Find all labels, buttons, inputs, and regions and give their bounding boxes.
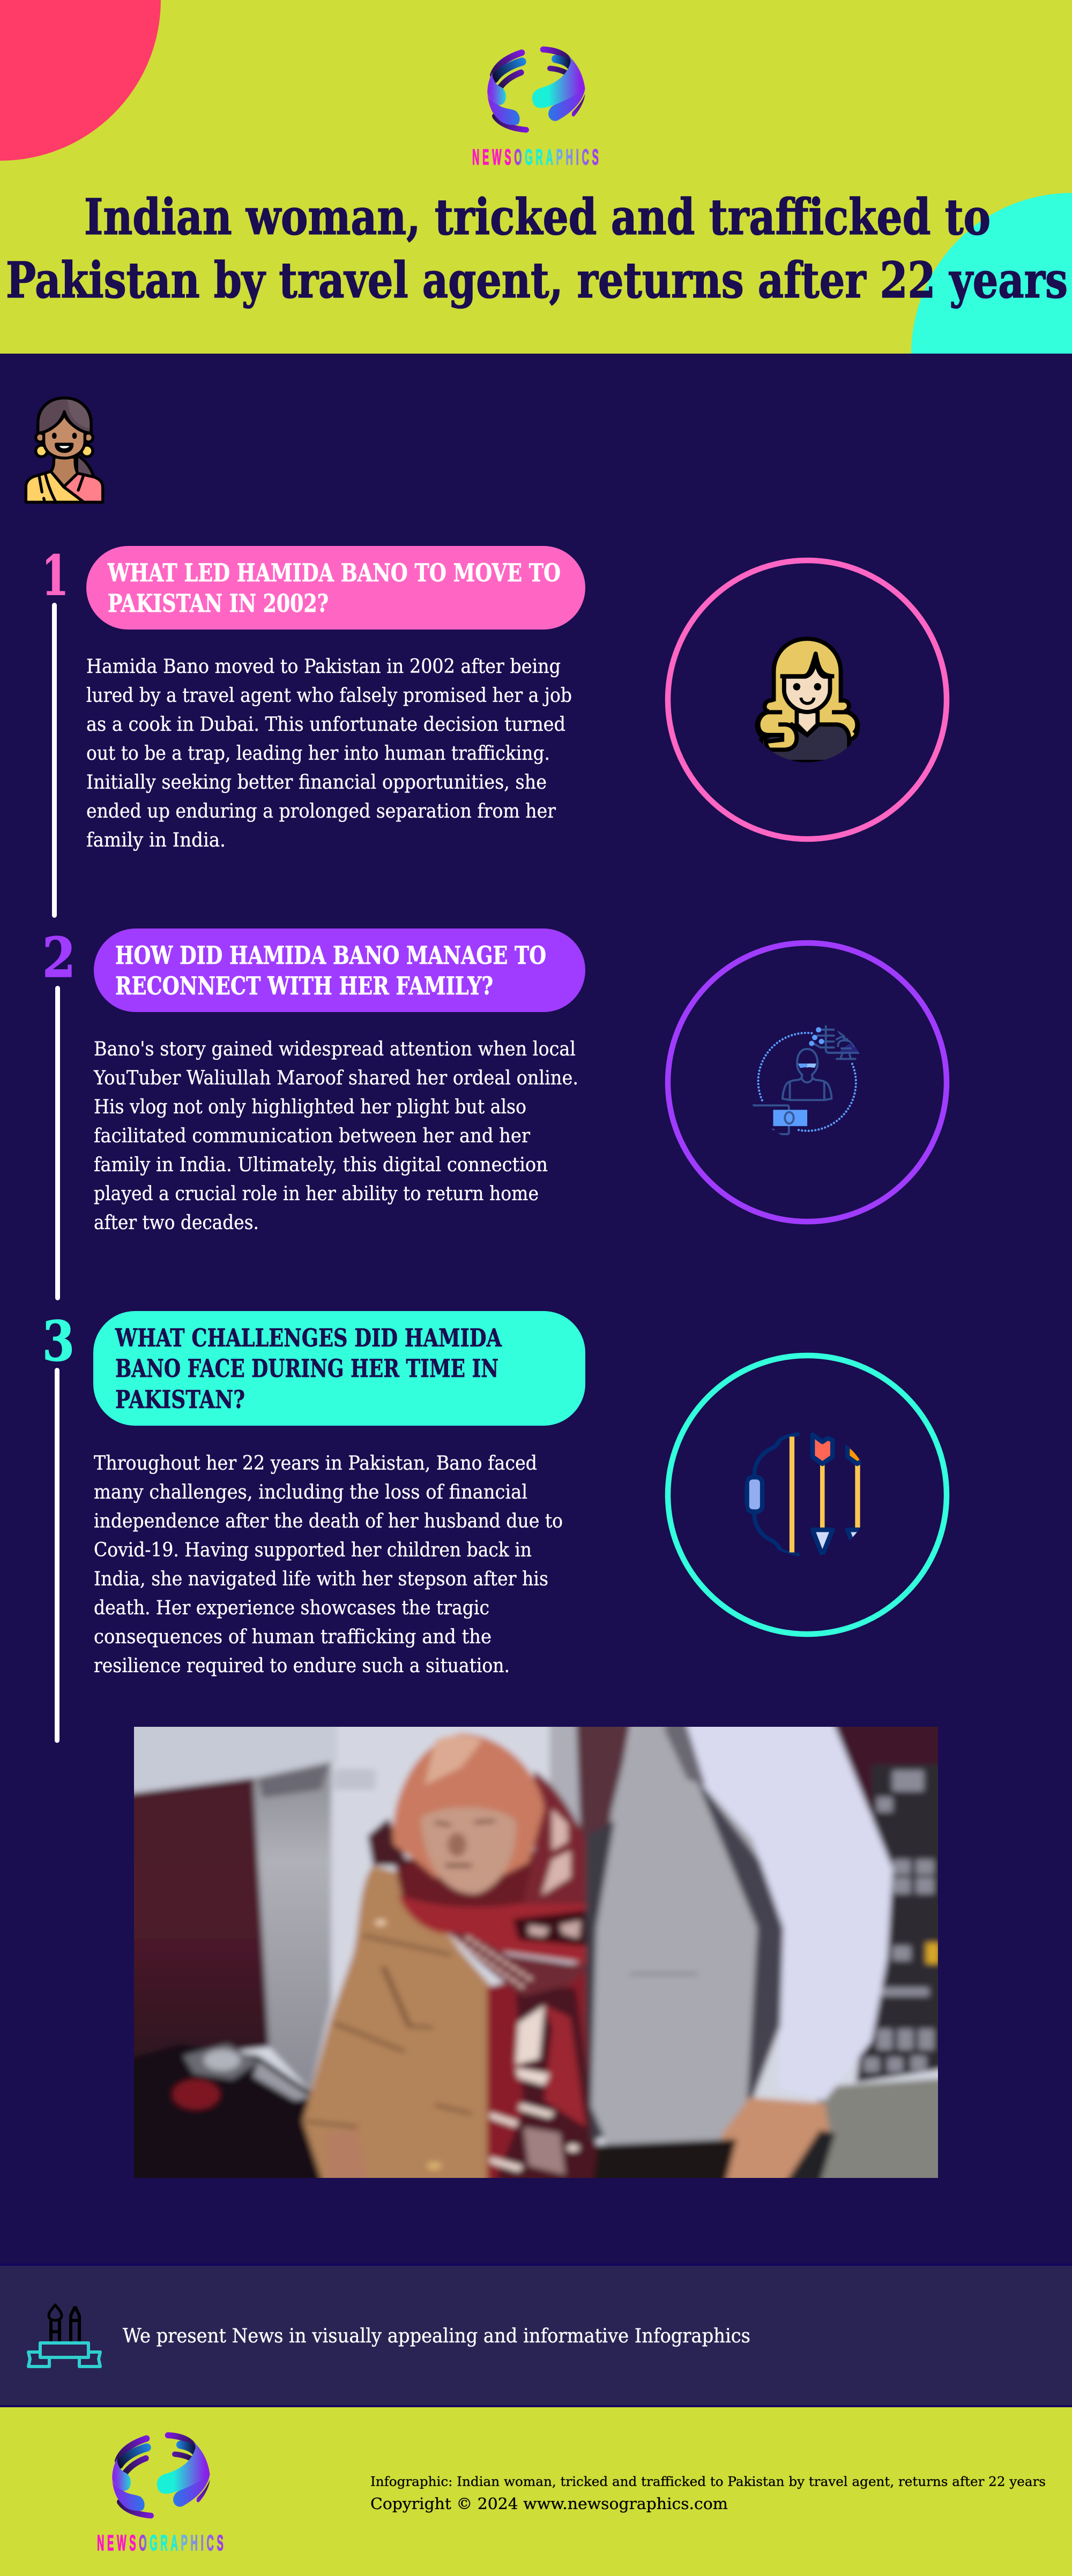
text block: answer 3: Throughout her 22 years in Pakistan, Bano faced — [94, 1452, 537, 1474]
tagline text: We present News in visually appealing and informative Infographics — [123, 2325, 750, 2347]
icon: brushes on ribbon — [28, 2305, 100, 2367]
panel: question 2 heading: RECONNECT WITH HER FAMILY? — [115, 971, 493, 1000]
number 1: 1 — [42, 544, 69, 608]
circle: bow and arrows icon — [668, 1356, 947, 1634]
panel: question 3 heading: WHAT CHALLENGES DID HAMIDA — [115, 1323, 502, 1352]
panel: question 1 heading: WHAT LED HAMIDA BANO TO MOVE TO — [107, 558, 561, 587]
tagline band — [0, 2264, 1072, 2407]
text block: answer 3: death. Her experience showcases the tragic — [94, 1597, 489, 1619]
icon: masked person with network — [750, 1024, 863, 1134]
text block: answer 2: after two decades. — [94, 1212, 259, 1234]
header band — [0, 0, 1072, 354]
text block: answer 2: His vlog not only highlighted her plight but also — [94, 1096, 526, 1118]
text block: answer 3: resilience required to endure such a situation. — [94, 1655, 510, 1677]
text block: answer 1: lured by a travel agent who falsely promised her a job — [86, 685, 572, 707]
icon: Indian woman avatar — [26, 398, 103, 502]
panel: question 3 heading: PAKISTAN? — [115, 1385, 245, 1414]
text block: answer 1: out to be a trap, leading her into human trafficking. — [86, 743, 550, 765]
text block: answer 2: played a crucial role in her ability to return home — [94, 1183, 539, 1205]
text block: answer 1 — [86, 656, 572, 851]
section 3 timeline: number and line — [42, 1309, 75, 1743]
timeline line — [52, 603, 57, 918]
logo mark — [112, 2435, 210, 2515]
footer band — [0, 2407, 1072, 2576]
text block: answer 3 — [94, 1452, 563, 1677]
panel: question 1 heading — [86, 546, 585, 630]
text block: answer 1: family in India. — [86, 829, 226, 851]
logo wordmark: NEWSOGRAPHICS — [472, 145, 599, 169]
red corner circle — [0, 0, 161, 161]
footer credits — [370, 2474, 1046, 2513]
timeline line — [55, 1368, 59, 1743]
text block: answer 2 — [93, 1038, 578, 1234]
photo: Hamida Bano walking with a man — [134, 1727, 938, 2178]
title — [6, 188, 1068, 309]
footer credits: Infographic: Indian woman, tricked and trafficked to Pakistan by travel agent, returns after 22 years — [370, 2474, 1046, 2489]
panel: question 3 heading: BANO FACE DURING HER TIME IN — [115, 1354, 498, 1383]
text block: answer 2: facilitated communication between her and her — [94, 1125, 531, 1147]
icon: bow and arrows — [747, 1434, 867, 1555]
text block: answer 1: as a cook in Dubai. This unfortunate decision turned — [86, 714, 565, 736]
panel: question 1 heading: PAKISTAN IN 2002? — [108, 589, 329, 618]
text block: answer 3: consequences of human trafficking and the — [94, 1626, 492, 1648]
text block: answer 2: family in India. Ultimately, this digital connection — [94, 1154, 548, 1176]
text block: answer 2: Bano's story gained widespread attention when local — [94, 1038, 576, 1060]
circle: blonde woman icon — [668, 560, 947, 839]
icon: blonde woman — [757, 639, 858, 765]
text block: answer 3: India, she navigated life with her stepson after his — [94, 1568, 548, 1590]
footer credits: Copyright © 2024 www.newsographics.com — [370, 2495, 728, 2513]
logo mark — [487, 49, 585, 130]
panel: question 2 heading: HOW DID HAMIDA BANO MANAGE TO — [115, 941, 546, 970]
text block: answer 1: Hamida Bano moved to Pakistan in 2002 after being — [86, 656, 561, 678]
logo wordmark: NEWSOGRAPHICS — [97, 2530, 224, 2555]
number 3: 3 — [42, 1309, 75, 1374]
number 2: 2 — [42, 926, 76, 990]
cyan corner circle — [911, 193, 1072, 354]
panel: question 3 heading — [93, 1311, 585, 1426]
text block: answer 2: YouTuber Waliullah Maroof shared her ordeal online. — [93, 1067, 578, 1089]
text block: answer 3: independence after the death of her husband due to — [94, 1510, 563, 1532]
text block: answer 3: many challenges, including the loss of financial — [94, 1481, 527, 1503]
panel: question 2 heading — [94, 928, 585, 1012]
section 1 timeline: number and line — [42, 544, 69, 918]
logo: footer — [97, 2435, 224, 2555]
circle: hacker icon — [668, 943, 947, 1222]
logo: header — [472, 49, 599, 169]
timeline line — [55, 986, 60, 1300]
text block: answer 1: ended up enduring a prolonged separation from her — [86, 800, 556, 822]
text block: answer 3: Covid-19. Having supported her children back in — [94, 1539, 532, 1561]
text block: answer 1: Initially seeking better financial opportunities, she — [86, 772, 547, 793]
section 2 timeline: number and line — [42, 926, 76, 1300]
